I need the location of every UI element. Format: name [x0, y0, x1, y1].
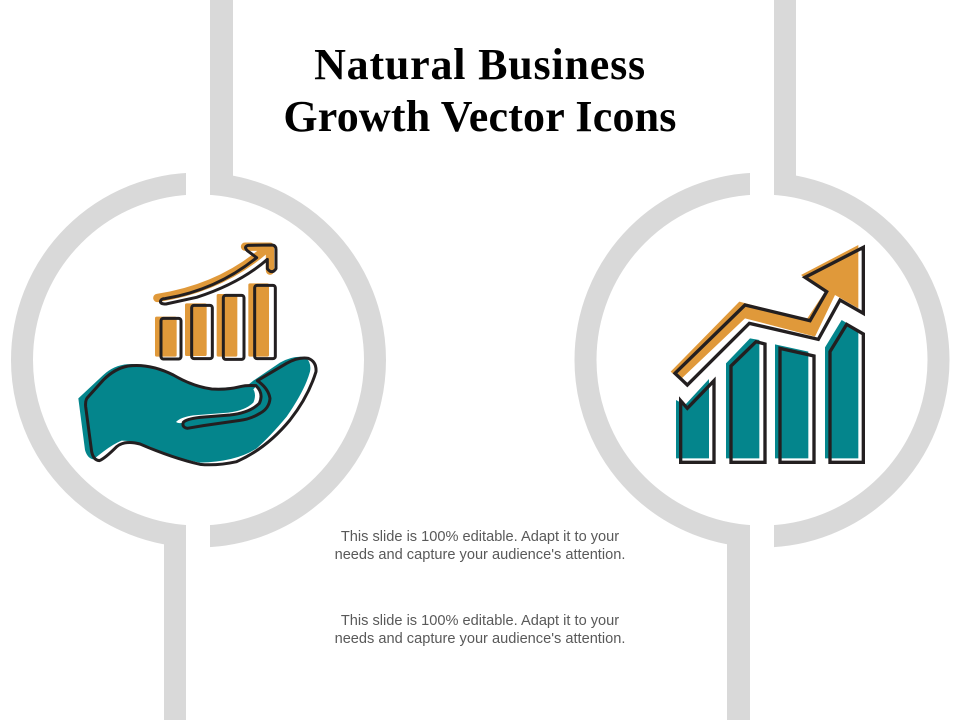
hand fill	[78, 357, 310, 463]
left ring	[22, 0, 375, 720]
icon: hand holding growth chart	[78, 245, 316, 465]
text block 1: needs and capture your audience's attention.	[335, 547, 625, 563]
hand outline	[86, 358, 316, 465]
orange bars	[155, 317, 177, 357]
right ring	[586, 0, 938, 720]
icon: bar chart with rising arrow	[671, 245, 863, 462]
finger highlight	[176, 386, 261, 423]
arrow fill	[671, 245, 858, 380]
arrow outline	[675, 247, 863, 385]
title	[283, 40, 677, 141]
bar outlines	[161, 318, 181, 359]
bar outlines	[681, 381, 714, 462]
arrow orange	[157, 247, 270, 298]
teal bars	[676, 379, 709, 458]
text block 1	[335, 529, 625, 563]
title: Natural Business	[314, 40, 646, 89]
text block 2	[335, 613, 625, 647]
text block 2: This slide is 100% editable. Adapt it to your	[341, 613, 619, 629]
text block 1: This slide is 100% editable. Adapt it to your	[341, 529, 619, 545]
arrow outline	[160, 245, 276, 304]
text block 2: needs and capture your audience's attention.	[335, 631, 625, 647]
title: Growth Vector Icons	[283, 92, 677, 141]
